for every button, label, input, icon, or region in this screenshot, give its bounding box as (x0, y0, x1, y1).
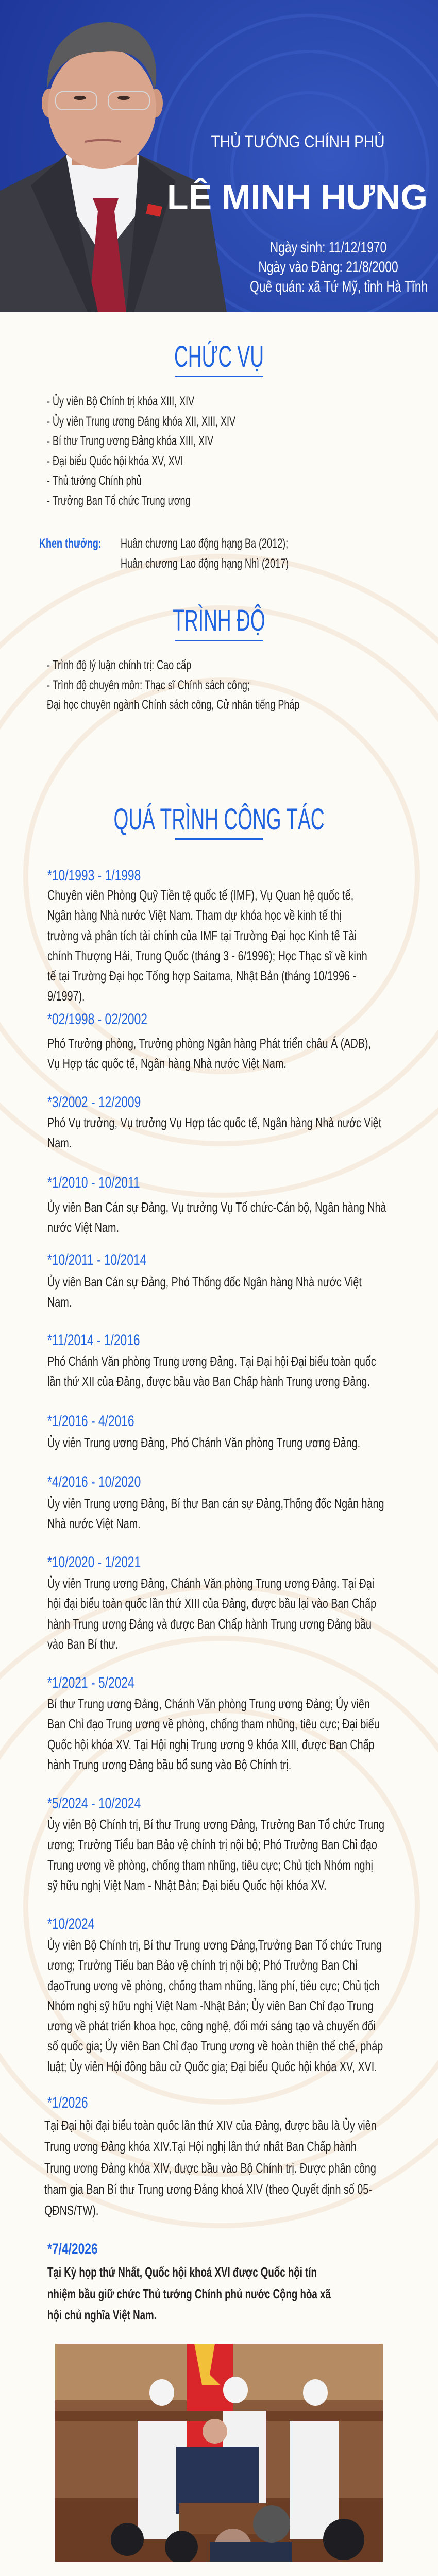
text: Ủy viên Bộ Chính trị, Bí thư Trung ương Đảng,Trưởng Ban Tổ chức Trung (47, 1937, 382, 1953)
personal info: Ngày sinh: 11/12/1970 (270, 239, 386, 256)
awards: Khen thưởng: (39, 536, 102, 551)
text: hành Trung ương Đảng bầu bổ sung vào Bộ Chính trị. (47, 1757, 291, 1772)
awards: Huân chương Lao động hạng Nhì (2017) (121, 556, 289, 571)
timeline entry 3: *3/2002 - 12/2009 (47, 1094, 141, 1111)
personal info (250, 239, 428, 295)
personal info: Quê quán: xã Tứ Mỹ, tỉnh Hà Tĩnh (250, 278, 428, 295)
text: QĐNS/TW). (44, 2202, 98, 2218)
text: hội đại biểu toàn quốc lần thứ XIII của Đảng, được bầu lại vào Ban Chấp (47, 1596, 376, 1611)
text: Tại Đại hội đại biểu toàn quốc lần thứ XIV của Đảng, được bầu là Ủy viên (44, 2117, 377, 2133)
list: positions (47, 394, 235, 508)
awards (39, 536, 289, 571)
name: LÊ MINH HƯNG (167, 178, 428, 217)
text: Quốc hội khóa XV. Tại Hội nghị Trung ương 9 khóa XIII, được Ban Chấp (47, 1737, 375, 1752)
timeline entry 12: *10/2024 (47, 1916, 94, 1933)
timeline entry 11: *5/2024 - 10/2024 (47, 1795, 141, 1812)
list: education: - Trình độ chuyên môn: Thạc sĩ Chính sách công; (47, 678, 250, 692)
timeline entry 4: *1/2010 - 10/2011 (47, 1174, 140, 1191)
header: blue banner with portrait (0, 0, 438, 312)
text: Ủy viên Trung ương Đảng, Chánh Văn phòng Trung ương Đảng. Tại Đại (47, 1575, 374, 1591)
text: Phó Vụ trưởng, Vụ trưởng Vụ Hợp tác quốc tế, Ngân hàng Nhà nước Việt (47, 1115, 381, 1130)
personal info: Ngày vào Đảng: 21/8/2000 (258, 259, 398, 276)
timeline entry 14 (bold): *7/4/2026 (47, 2241, 98, 2258)
portrait (0, 22, 227, 312)
text: Nam. (47, 1294, 72, 1310)
list: positions: - Ủy viên Bộ Chính trị khóa XIII, XIV (47, 394, 194, 409)
text: Nam. (47, 1135, 72, 1150)
text: luật; Ủy viên Hội đồng bầu cử Quốc gia; Đại biểu Quốc hội khóa XV, XVI. (47, 2059, 377, 2074)
decorative drum in header (154, 14, 438, 312)
text: 9/1997). (47, 988, 85, 1004)
text: ương; Trưởng Tiểu ban Bảo vệ chính trị nội bộ; Phó Trưởng Ban Chỉ (47, 1957, 357, 1973)
heading: QUÁ TRÌNH CÔNG TÁC: QUÁ TRÌNH CÔNG TÁC (113, 803, 325, 836)
text: lần thứ XII của Đảng, được bầu vào Ban Chấp hành Trung ương Đảng. (47, 1374, 370, 1389)
text: hành Trung ương Đảng và được Ban Chấp hành Trung ương Đảng bầu (47, 1616, 372, 1632)
timeline entry 13: *1/2026 (47, 2094, 88, 2111)
timeline entry 1: *10/1993 - 1/1998 (47, 867, 141, 884)
text: Trung ương về phòng, chống tham nhũng, tiêu cực; Chủ tịch Nhóm nghị (47, 1857, 373, 1873)
text: Ủy viên Trung ương Đảng, Bí thư Ban cán sự Đảng,Thống đốc Ngân hàng (47, 1496, 384, 1511)
timeline entry 5: *10/2011 - 10/2014 (47, 1251, 146, 1268)
timeline entry 7: *1/2016 - 4/2016 (47, 1413, 134, 1430)
list: education: Đại học chuyên ngành Chính sách công, Cử nhân tiếng Pháp (47, 698, 299, 712)
text: Ủy viên Ban Cán sự Đảng, Phó Thống đốc Ngân hàng Nhà nước Việt (47, 1274, 362, 1290)
text: vào Ban Bí thư. (47, 1636, 118, 1652)
text: Vụ Hợp tác quốc tế, Ngân hàng Nhà nước Việt Nam. (47, 1056, 287, 1071)
heading: CHỨC VỤ: CHỨC VỤ (174, 340, 264, 374)
timeline entry 2: *02/1998 - 02/2002 (47, 1011, 147, 1028)
text: Trung ương Đảng khóa XIV.Tại Hội nghị lần thứ nhất Ban Chấp hành (44, 2139, 357, 2154)
list: positions: - Ủy viên Trung ương Đảng khóa XII, XIII, XIV (47, 414, 235, 429)
text: Bí thư Trung ương Đảng, Chánh Văn phòng Trung ương Đảng; Ủy viên (47, 1696, 370, 1711)
text: Ủy viên Bộ Chính trị, Bí thư Trung ương Đảng, Trưởng Ban Tổ chức Trung (47, 1817, 384, 1832)
text: Tại Kỳ họp thứ Nhất, Quốc hội khoá XVI được Quốc hội tín (47, 2264, 317, 2280)
text: nước Việt Nam. (47, 1219, 119, 1235)
timeline entry 8: *4/2016 - 10/2020 (47, 1473, 141, 1490)
list: positions: - Đại biểu Quốc hội khóa XV, XVI (47, 453, 183, 468)
photo: swearing-in ceremony (55, 2344, 383, 2562)
timeline entry 9: *10/2020 - 1/2021 (47, 1554, 141, 1571)
text: Phó Chánh Văn phòng Trung ương Đảng. Tại Đại hội Đại biểu toàn quốc (47, 1353, 376, 1369)
text: trường và phân tích tài chính của IMF tại Trường Đại học Kinh tế Tài (47, 928, 357, 943)
text: Ban Chỉ đạo Trung ương về phòng, chống tham nhũng, tiêu cực; Đại biểu (47, 1716, 380, 1732)
list: positions: - Trưởng Ban Tổ chức Trung ương (47, 494, 191, 508)
heading: TRÌNH ĐỘ: TRÌNH ĐỘ (173, 604, 265, 637)
text: tế tại Trường Đại học Tổng hợp Saitama, Nhật Bản (tháng 10/1996 - (47, 968, 356, 984)
text: Ủy viên Trung ương Đảng, Phó Chánh Văn phòng Trung ương Đảng. (47, 1435, 360, 1450)
list: positions: - Thủ tướng Chính phủ (47, 473, 142, 488)
text: Chuyên viên Phòng Quỹ Tiền tệ quốc tế (IMF), Vụ Quan hệ quốc tế, (47, 887, 353, 903)
text: chính Thượng Hải, Trung Quốc (tháng 3 - 6/1996); Học Thạc sĩ về kinh (47, 948, 367, 963)
list: education: - Trình độ lý luận chính trị: Cao cấp (47, 658, 191, 672)
text: nhiệm bầu giữ chức Thủ tướng Chính phủ nước Cộng hòa xã (47, 2285, 331, 2301)
subtitle: THỦ TƯỚNG CHÍNH PHỦ (211, 132, 385, 151)
timeline entry 10: *1/2021 - 5/2024 (47, 1674, 134, 1691)
text: Trung ương Đảng khóa XIV, được bầu vào Bộ Chính trị. Được phân công (44, 2160, 376, 2176)
text: ương về phát triển khoa học, công nghệ, đổi mới sáng tạo và chuyển đổi (47, 2018, 376, 2033)
list: education (47, 658, 299, 712)
text: Phó Trưởng phòng, Trưởng phòng Ngân hàng Phát triển châu Á (ADB), (47, 1036, 371, 1051)
text: tham gia Ban Bí thư Trung ương Đảng khoá XIV (theo Quyết định số 05- (44, 2181, 372, 2197)
awards: Huân chương Lao động hạng Ba (2012); (121, 536, 288, 551)
timeline entry 6: *11/2014 - 1/2016 (47, 1332, 140, 1349)
text: Nhóm nghị sỹ hữu nghị Việt Nam -Nhật Bản; Ủy viên Ban Chỉ đạo Trung (47, 1998, 373, 2013)
text: ương; Trưởng Tiểu ban Bảo vệ chính trị nội bộ; Phó Trưởng Ban Chỉ đạo (47, 1837, 377, 1852)
text: đạoTrung ương về phòng, chống tham nhũng, lãng phí, tiêu cực; Chủ tịch (47, 1978, 380, 1993)
text: Nhà nước Việt Nam. (47, 1516, 141, 1531)
text: Ngân hàng Nhà nước Việt Nam. Tham dự khóa học về kinh tế thị (47, 907, 341, 923)
text: sỹ hữu nghị Việt Nam - Nhật Bản; Đại biểu Quốc hội khóa XV. (47, 1877, 327, 1893)
text: hội chủ nghĩa Việt Nam. (47, 2307, 157, 2323)
text: Ủy viên Ban Cán sự Đảng, Vụ trưởng Vụ Tổ chức-Cán bộ, Ngân hàng Nhà (47, 1199, 386, 1215)
text: số quốc gia; Ủy viên Ban Chỉ đạo Trung ương về hoàn thiện thể chế, pháp (47, 2038, 383, 2054)
list: positions: - Bí thư Trung ương Đảng khóa XIII, XIV (47, 434, 213, 448)
